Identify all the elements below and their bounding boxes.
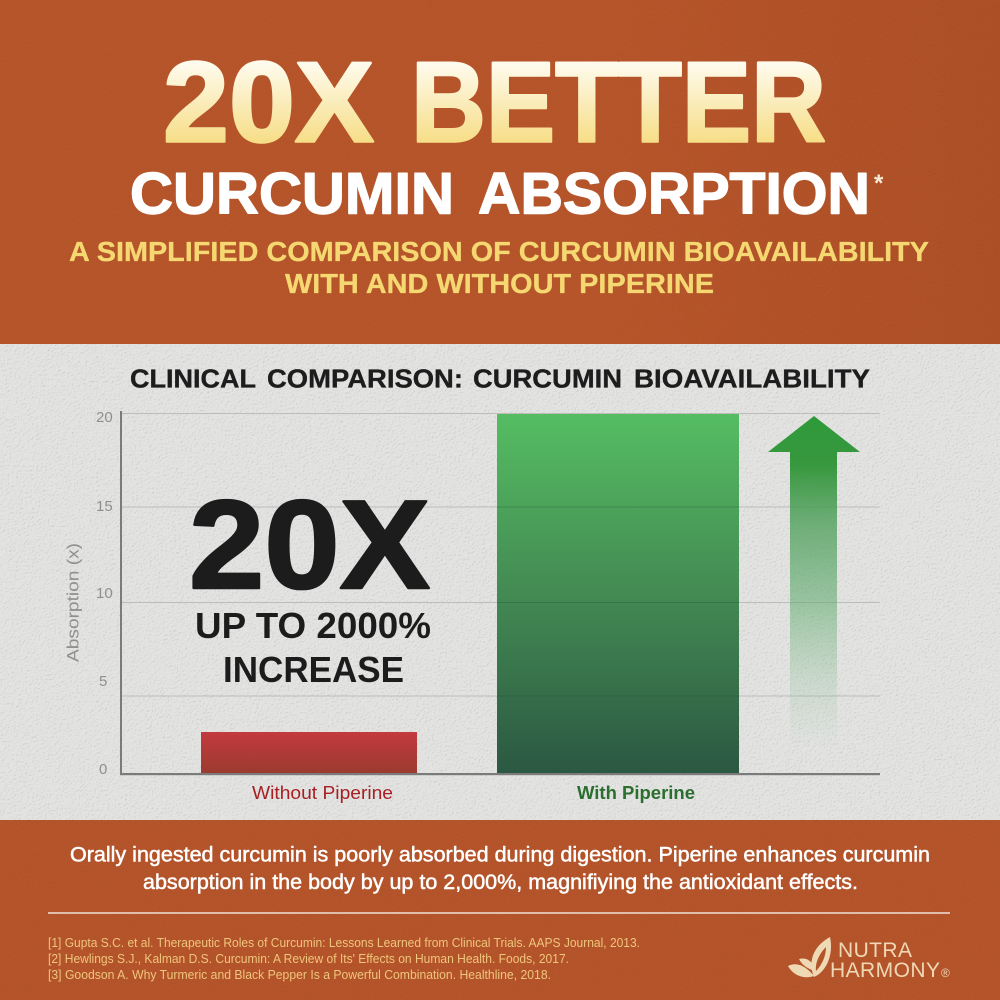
- wordmark: [830, 939, 950, 982]
- callout: up to 2000% increase: UP TO 2000%: [195, 605, 431, 646]
- subtitle: WITH AND WITHOUT PIPERINE: [285, 268, 714, 299]
- bar: without piperine: [201, 732, 417, 773]
- y axis tick labels: 10: [96, 585, 113, 602]
- chart heading: BIOAVAILABILITY: [634, 364, 870, 394]
- wordmark: NUTRA: [838, 939, 912, 962]
- category label: with piperine: With Piperine: [577, 783, 695, 803]
- y axis tick labels: 0: [99, 761, 107, 778]
- title: 20X BETTER: BETTER: [411, 40, 826, 167]
- bar: with piperine: [497, 414, 739, 773]
- heading: curcumin absorption: *: [874, 170, 884, 197]
- text block: references: [1] Gupta S.C. et al. Therapeutic Roles of Curcumin: Lessons Learned from Clinical Trials. AAPS Journal, 2013.: [48, 936, 640, 950]
- heading: curcumin absorption: ABSORPTION: [478, 161, 870, 226]
- x axis line: [120, 773, 880, 775]
- y axis tick labels: 15: [96, 498, 113, 515]
- bar chart: [64, 409, 880, 803]
- text block: explanation: Orally ingested curcumin is poorly absorbed during digestion. Piperine enhances curcumin: [70, 844, 930, 866]
- logo: Nutra Harmony: [788, 937, 950, 982]
- callout: up to 2000% increase: [195, 605, 431, 690]
- arrow: upward increase: [768, 416, 860, 748]
- chart heading: [130, 364, 870, 394]
- chart heading: COMPARISON:: [267, 364, 463, 394]
- text block: references: [48, 936, 640, 982]
- y axis tick labels: 5: [99, 673, 107, 690]
- y axis line: [120, 411, 122, 775]
- y axis tick labels: 20: [96, 409, 113, 426]
- text block: explanation: [70, 844, 930, 894]
- panel: grey paper chart background: [0, 344, 1000, 820]
- chart heading: CURCUMIN: [473, 364, 622, 394]
- heading: curcumin absorption: CURCUMIN: [130, 161, 454, 226]
- callout: up to 2000% increase: INCREASE: [223, 649, 404, 690]
- subtitle: A SIMPLIFIED COMPARISON OF CURCUMIN BIOAVAILABILITY: [69, 236, 929, 267]
- panel: orange header background: [0, 0, 1000, 344]
- panel: orange footer background: [0, 820, 1000, 1000]
- wordmark: ®: [941, 966, 950, 980]
- title: 20X BETTER: [163, 40, 826, 167]
- y axis tick labels: [96, 409, 113, 778]
- text block: references: [3] Goodson A. Why Turmeric and Black Pepper Is a Powerful Combination. Healthline, 2018.: [48, 968, 551, 982]
- icon: leaves: [788, 937, 831, 977]
- chart heading: CLINICAL: [130, 364, 256, 394]
- text block: references: [2] Hewlings S.J., Kalman D.S. Curcumin: A Review of Its' Effects on Human Health. Foods, 2017.: [48, 952, 569, 966]
- heading: curcumin absorption: [130, 161, 884, 226]
- title: 20X BETTER: 20X: [163, 40, 374, 167]
- callout: 20X: 20X: [189, 474, 430, 615]
- category label: without piperine: Without Piperine: [252, 783, 393, 803]
- wordmark: HARMONY: [830, 959, 940, 982]
- subtitle: [69, 236, 929, 299]
- text block: explanation: absorption in the body by up to 2,000%, magnifiying the antioxidant effects.: [143, 871, 858, 894]
- y axis title: Absorption (x): [64, 543, 82, 662]
